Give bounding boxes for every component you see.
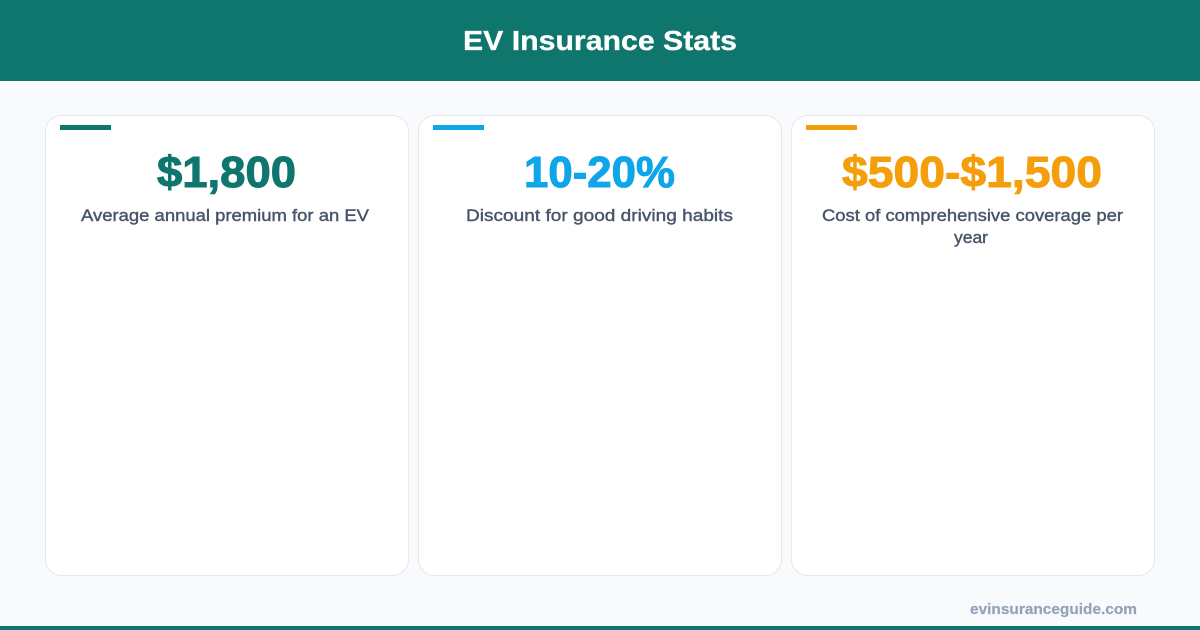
panel: good driving discount: [418, 116, 782, 576]
stat value: 10-20%: [524, 148, 675, 197]
footer source URL: evinsuranceguide.com: [970, 601, 1137, 618]
bottom accent strip: [0, 626, 1200, 630]
accent bar: [433, 125, 484, 130]
stat description: [822, 206, 1123, 247]
header band with title: [0, 0, 1200, 81]
stat description: Average annual premium for an EV: [81, 206, 370, 225]
accent bar: [60, 125, 111, 130]
stat value: $1,800: [157, 148, 296, 197]
panel: comprehensive coverage cost: [792, 116, 1154, 576]
title: EV Insurance Stats: [463, 25, 737, 56]
accent bar: [806, 125, 857, 130]
stat description: year: [954, 228, 988, 247]
stat description: Discount for good driving habits: [466, 206, 733, 225]
panel: average annual premium: [46, 116, 408, 576]
stat value: $500-$1,500: [842, 148, 1102, 197]
stat description: Cost of comprehensive coverage per: [822, 206, 1123, 225]
